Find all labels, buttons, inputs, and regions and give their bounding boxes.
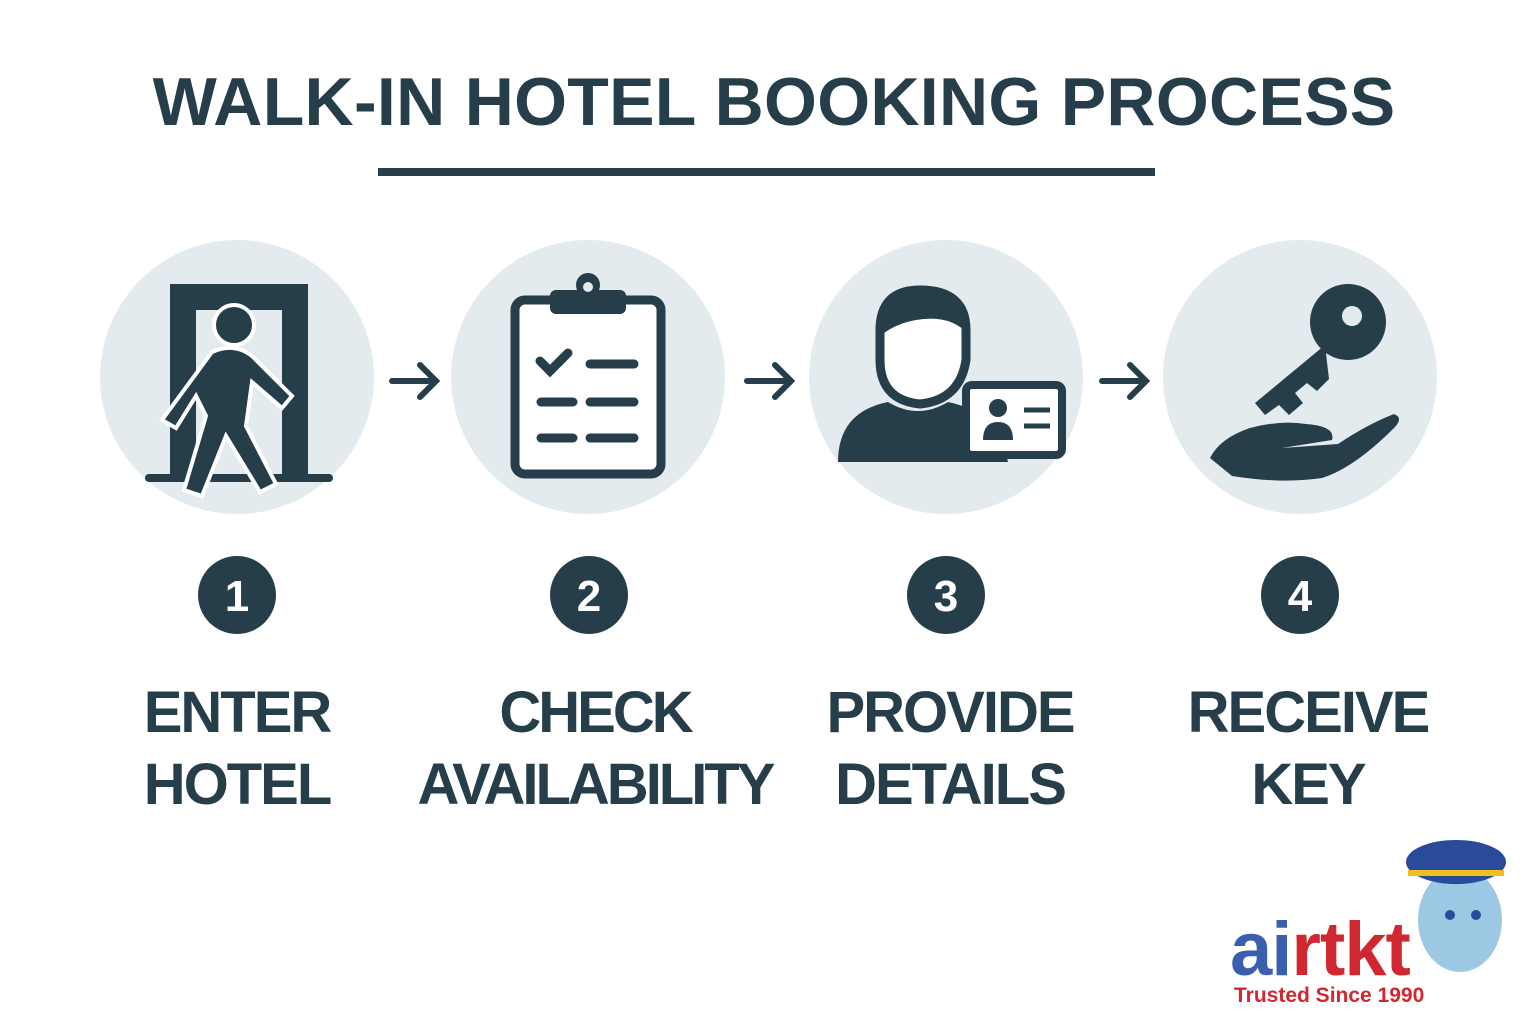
title: WALK-IN HOTEL BOOKING PROCESS: [153, 64, 1395, 140]
text: RECEIVE: [1188, 680, 1428, 745]
text: AVAILABILITY: [418, 752, 772, 817]
text: DETAILS: [835, 752, 1065, 817]
text: PROVIDE: [826, 680, 1074, 745]
step labels: [144, 680, 331, 817]
logo: airtkt: [1230, 840, 1506, 1007]
step 3 icon: person with ID: [809, 240, 1083, 514]
step labels: ENTER: [144, 680, 330, 745]
text: CHECK: [499, 680, 691, 745]
arrow 3: [1102, 365, 1146, 397]
number badges: 1: [225, 572, 249, 621]
number badges: [198, 556, 1339, 634]
logo: airtkt: airtkt: [1230, 907, 1410, 992]
number badges: 2: [577, 572, 601, 621]
logo: airtkt: Trusted Since 1990: [1234, 984, 1424, 1007]
step 4 icon: key in hand: [1163, 240, 1437, 514]
step 1 icon: person entering door: [100, 240, 374, 514]
text: KEY: [1251, 752, 1365, 817]
number badges: 3: [934, 572, 958, 621]
number badges: 4: [1288, 572, 1313, 621]
arrow 2: [747, 365, 791, 397]
arrow 1: [392, 365, 436, 397]
step labels: HOTEL: [144, 752, 330, 817]
step 2 icon: clipboard: [451, 240, 725, 514]
